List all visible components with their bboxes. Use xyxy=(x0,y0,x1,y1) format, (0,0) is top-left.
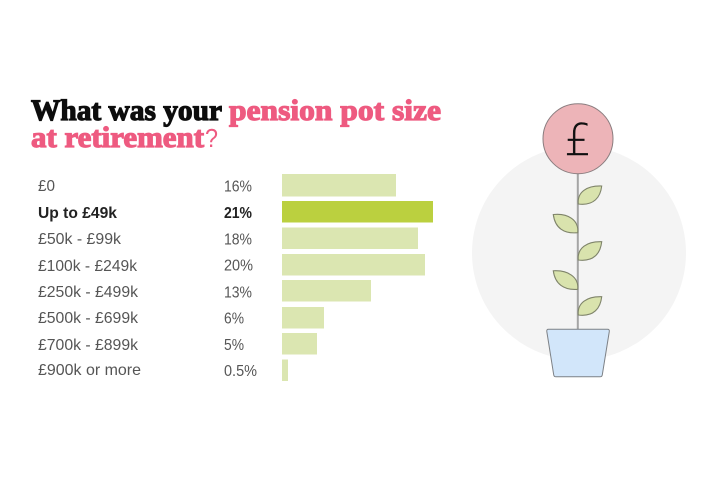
row: £100k - £249k xyxy=(38,254,425,276)
title pink part line 1: pension pot size xyxy=(229,94,441,127)
row: Up to £49k (highlighted): Up to £49k xyxy=(38,205,117,222)
row: £100k - £249k: £100k - £249k xyxy=(38,258,138,275)
coin with pound sign: £ xyxy=(564,115,592,166)
leaf 2 xyxy=(553,214,578,233)
row: Up to £49k (highlighted) xyxy=(38,201,433,222)
pot xyxy=(547,329,609,377)
leaf 3 xyxy=(578,242,602,260)
title xyxy=(31,94,441,154)
row: £250k - £499k: £250k - £499k xyxy=(38,284,139,301)
question mark: ? xyxy=(205,123,218,153)
row: £100k - £249k: 20% xyxy=(224,258,253,274)
leaf 1 xyxy=(578,186,602,204)
row: £0 xyxy=(38,174,396,196)
row: £500k - £699k: 6% xyxy=(224,310,244,328)
bar chart xyxy=(38,174,433,381)
row: £250k - £499k xyxy=(38,280,371,302)
row: £250k - £499k: 13% xyxy=(224,284,252,302)
row: £900k or more: 0.5% xyxy=(224,363,257,380)
background circle xyxy=(472,146,686,360)
title pink part line 2: at retirement xyxy=(31,121,204,154)
coin with pound sign xyxy=(543,104,613,174)
row: £50k - £99k: £50k - £99k xyxy=(38,231,122,248)
row: £700k - £899k xyxy=(38,333,317,354)
row: £700k - £899k: £700k - £899k xyxy=(38,337,139,354)
row: £50k - £99k: 18% xyxy=(224,232,252,248)
row: £0: £0 xyxy=(38,178,55,195)
row: £700k - £899k: 5% xyxy=(224,337,244,354)
illustration: plant in pot xyxy=(472,104,686,377)
row: Up to £49k (highlighted): 21% xyxy=(224,205,252,222)
row: £50k - £99k xyxy=(38,228,418,249)
stem xyxy=(577,172,579,330)
row: £0: 16% xyxy=(224,178,252,196)
row: £500k - £699k: £500k - £699k xyxy=(38,310,139,327)
title black part: What was your xyxy=(31,94,222,127)
row: £900k or more: £900k or more xyxy=(38,362,141,379)
row: £500k - £699k xyxy=(38,307,324,328)
leaf 4 xyxy=(553,271,578,289)
row: £900k or more xyxy=(38,360,288,381)
leaf 5 xyxy=(578,297,602,315)
